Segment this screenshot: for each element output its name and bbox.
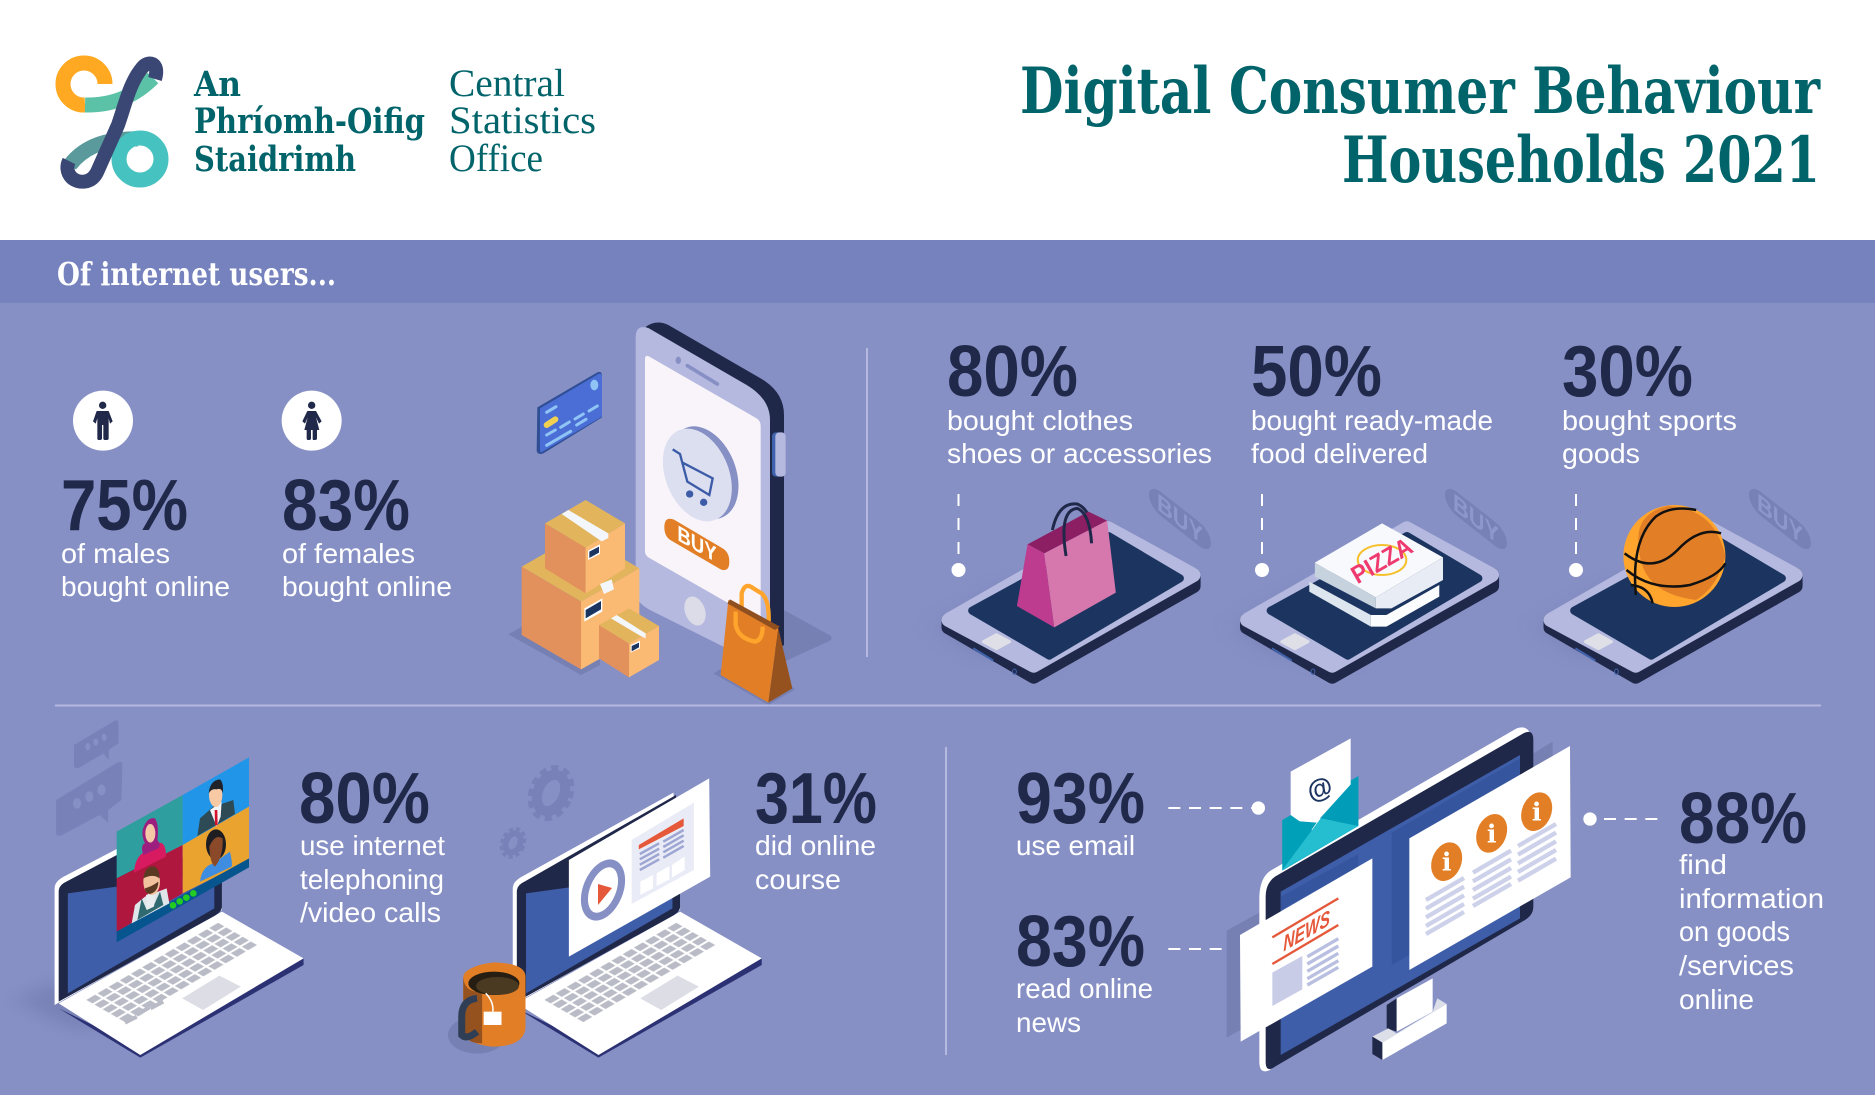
logo text: Irish name: Staidrimh xyxy=(194,139,356,180)
laptop xyxy=(55,843,304,1058)
stat: males xyxy=(61,391,230,602)
stat: email: 93% xyxy=(1016,759,1145,839)
logo text: Irish name: An xyxy=(193,64,241,105)
video call panel xyxy=(117,757,249,942)
stat: clothes xyxy=(947,332,1212,469)
stat: information: online xyxy=(1679,984,1754,1015)
stat: sports xyxy=(1562,332,1737,469)
stat: information: on goods xyxy=(1679,916,1790,947)
logo mark xyxy=(63,63,161,182)
stat: email: use email xyxy=(1016,830,1135,861)
ghost chat bubbles xyxy=(56,720,122,836)
stat: news: news xyxy=(1016,1007,1081,1038)
stat: males: 75% xyxy=(61,466,188,546)
email envelope xyxy=(1282,738,1358,871)
stat: online course: did online xyxy=(755,830,876,861)
stat: information: information xyxy=(1679,883,1824,914)
icon: female xyxy=(282,391,342,451)
laptop shadow xyxy=(15,980,102,1033)
monitor stand xyxy=(1372,978,1447,1060)
info panel: i xyxy=(1442,847,1451,877)
stat: online course: 31% xyxy=(755,759,877,839)
stat: clothes: bought clothes xyxy=(947,405,1133,436)
illustration: monitor with email, news, info xyxy=(1168,727,1665,1071)
logo text: Irish name: Phríomh-Oifig xyxy=(194,101,425,142)
phone xyxy=(1236,528,1492,677)
stat: food xyxy=(1251,332,1493,469)
stat: food: 50% xyxy=(1251,332,1382,412)
credit card xyxy=(537,372,602,454)
course panel xyxy=(569,778,710,957)
divider xyxy=(866,348,868,657)
logo text: Irish name xyxy=(193,64,425,180)
call controls xyxy=(170,890,197,909)
logo text: English name: Statistics xyxy=(449,99,596,142)
cart button xyxy=(650,416,751,532)
info panel: i xyxy=(1532,797,1541,827)
stat: males: of males xyxy=(61,538,170,569)
illustration: laptop with online course xyxy=(448,778,762,1058)
bearded man xyxy=(132,866,169,923)
stat: females: of females xyxy=(282,538,415,569)
pizza boxes xyxy=(1309,523,1443,627)
logo text: English name: Central xyxy=(449,62,565,105)
stat: females: bought online xyxy=(282,571,452,602)
title xyxy=(1020,54,1821,198)
stat: males: bought online xyxy=(61,571,230,602)
band heading: Of internet users... xyxy=(57,255,336,293)
email envelope: @ xyxy=(1303,770,1337,807)
pizza label: PIZZA xyxy=(1346,532,1418,590)
section band xyxy=(0,240,1875,303)
play button xyxy=(572,853,634,927)
ghost buy button: BUY xyxy=(1157,487,1203,550)
logo text: English name: Office xyxy=(449,137,543,180)
stat: females xyxy=(282,391,452,602)
stat: news: 83% xyxy=(1016,902,1145,982)
shopping bag xyxy=(713,586,795,705)
leader lines: top row xyxy=(952,494,1583,577)
illustration: phone with pizza xyxy=(1236,481,1507,677)
cardboard boxes xyxy=(508,500,659,677)
logo text: English name xyxy=(449,62,596,180)
buy button: BUY xyxy=(677,521,717,568)
phone xyxy=(1539,528,1796,677)
phone xyxy=(636,323,832,670)
man in suit xyxy=(197,779,235,836)
ghost panel shadow xyxy=(1227,742,1553,1038)
stat: sports: bought sports xyxy=(1562,405,1737,436)
play triangle xyxy=(598,884,612,905)
news panel: NEWS xyxy=(1283,905,1330,957)
ghost buy button: BUY xyxy=(1757,487,1803,550)
stat: video calls: /video calls xyxy=(300,897,441,928)
stat: video calls xyxy=(299,759,445,928)
stat: video calls: use internet xyxy=(300,830,445,861)
stat: sports: goods xyxy=(1562,438,1640,469)
monitor xyxy=(1259,727,1533,1071)
woman with curly hair xyxy=(200,829,232,882)
stat: females: 83% xyxy=(282,466,410,546)
header band xyxy=(0,0,1875,240)
stat: food: bought ready-made xyxy=(1251,405,1493,436)
info panel: i xyxy=(1487,818,1496,848)
stat: information: /services xyxy=(1679,950,1794,981)
illustration: laptop with video call xyxy=(15,720,304,1058)
divider xyxy=(55,704,1821,706)
stat: information: find xyxy=(1679,849,1727,880)
stat: online course xyxy=(755,759,877,895)
buy button xyxy=(664,519,729,570)
stat: clothes: shoes or accessories xyxy=(947,438,1212,469)
ghost buy button: BUY xyxy=(1453,487,1499,550)
leader lines xyxy=(1168,801,1665,949)
stat: online course: course xyxy=(755,864,841,895)
illustration: phone with shopping bag xyxy=(937,481,1211,677)
stat: news: read online xyxy=(1016,973,1153,1004)
stat: clothes: 80% xyxy=(947,332,1078,412)
stat: video calls: 80% xyxy=(299,759,430,839)
illustration: phone with basketball xyxy=(1539,481,1811,677)
stat: information: 88% xyxy=(1679,779,1807,859)
pink shopping bag xyxy=(1017,504,1116,627)
illustration: phone, boxes, card, bag xyxy=(508,323,832,705)
basketball xyxy=(1623,505,1725,607)
news panel xyxy=(1240,858,1372,1042)
phone xyxy=(937,528,1194,677)
stat: news xyxy=(1016,902,1153,1038)
mug xyxy=(448,962,526,1054)
info panel xyxy=(1409,746,1571,970)
stat: information xyxy=(1679,779,1824,1015)
stat: sports: 30% xyxy=(1562,332,1693,412)
ghost gears xyxy=(498,762,579,861)
woman in hijab xyxy=(134,818,166,873)
stat: food: food delivered xyxy=(1251,438,1428,469)
stat: video calls: telephoning xyxy=(300,864,444,895)
icon: male xyxy=(73,391,133,451)
divider xyxy=(945,747,947,1055)
laptop xyxy=(513,793,762,1058)
